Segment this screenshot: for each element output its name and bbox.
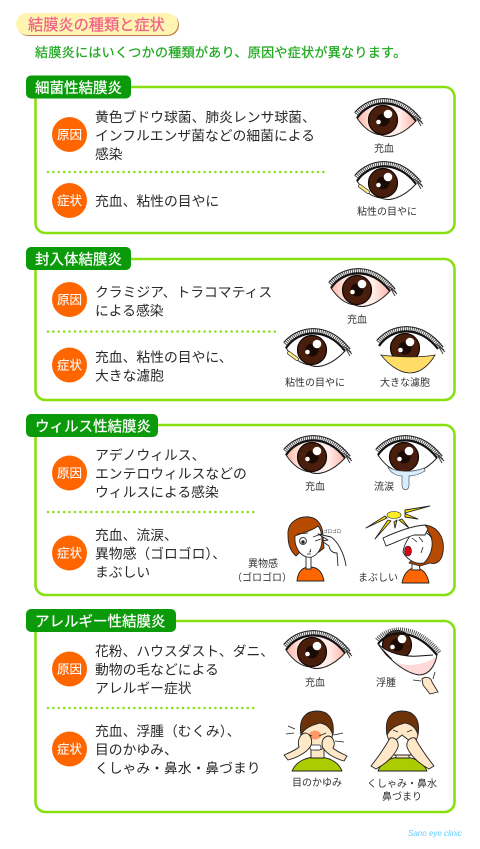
heading: ウィルス性結膜炎: ウィルス性結膜炎 — [35, 418, 151, 436]
illustration: rubbing eye — [288, 517, 346, 581]
title — [16, 13, 179, 36]
cause text: 花粉、ハウスダスト、ダニ、 — [95, 644, 274, 659]
icon: eye with discharge — [355, 162, 423, 199]
symptom text — [95, 350, 233, 384]
symptom text: 充血、粘性の目やに — [95, 194, 219, 209]
symptom text: 充血、浮腫（むくみ）、 — [95, 724, 240, 739]
badge: 症状 — [52, 348, 87, 382]
icon: red eye — [329, 269, 397, 306]
label: 鼻づまり — [382, 790, 422, 803]
symptom text — [95, 528, 226, 580]
symptom text: くしゃみ・鼻水・鼻づまり — [95, 760, 261, 776]
label: 大きな濾胞 — [380, 376, 430, 389]
label: 充血 — [305, 676, 325, 689]
heading: アレルギー性結膜炎 — [26, 609, 176, 632]
badge: 原因 — [52, 456, 87, 490]
cause text: 黄色ブドウ球菌、肺炎レンサ球菌、 — [95, 109, 316, 125]
cause text: アデノウィルス、 — [95, 447, 205, 463]
panel: ウィルス性結膜炎 — [26, 414, 454, 595]
heading: 封入体結膜炎 — [26, 247, 131, 270]
illustration: rubbing eye: ゴロゴロ — [323, 528, 341, 534]
icon: watering eye — [376, 436, 444, 490]
intro text: 結膜炎にはいくつかの種類があり、原因や症状が異なります。 — [35, 45, 406, 60]
badge: 症状 — [52, 183, 87, 218]
illustration: glare — [366, 506, 443, 583]
icon: red eye — [355, 99, 423, 136]
label: 充血 — [305, 480, 325, 493]
badge: 症状 — [52, 732, 87, 766]
label: 粘性の目やに — [285, 376, 345, 389]
badge: 原因: 原因 — [57, 466, 82, 480]
cause text: による感染 — [95, 302, 164, 318]
title: 結膜炎の種類と症状 — [28, 17, 165, 34]
icon: eye with discharge — [284, 329, 352, 366]
heading: 細菌性結膜炎: 細菌性結膜炎 — [35, 80, 122, 97]
cause text: 感染 — [95, 146, 123, 162]
label: まぶしい — [358, 572, 398, 584]
label: 目のかゆみ — [292, 777, 342, 789]
label: 異物感 — [248, 557, 278, 570]
label: 充血 — [374, 142, 394, 155]
cause text: エンテロウィルスなどの — [95, 466, 247, 482]
cause text: インフルエンザ菌などの細菌による — [95, 128, 315, 144]
icon: eye with follicles — [377, 327, 445, 373]
badge: 症状: 症状 — [57, 194, 82, 208]
label: 充血 — [347, 313, 367, 326]
badge: 症状: 症状 — [57, 546, 82, 560]
label: 浮腫 — [376, 677, 396, 689]
badge: 原因: 原因 — [57, 293, 82, 307]
symptom text: まぶしい — [95, 565, 150, 580]
cause text — [95, 109, 316, 162]
cause text: ウィルスによる感染 — [95, 484, 219, 500]
label: くしゃみ・鼻水 — [367, 777, 437, 790]
panel: 封入体結膜炎 — [26, 247, 454, 400]
illustration: sneezing — [371, 711, 434, 771]
heading: 細菌性結膜炎 — [26, 76, 131, 98]
symptom text — [95, 724, 261, 776]
icon: red eye — [284, 631, 352, 668]
badge: 症状 — [52, 536, 87, 570]
heading: 封入体結膜炎: 封入体結膜炎 — [35, 252, 122, 268]
panel: アレルギー性結膜炎 — [26, 609, 454, 812]
label — [232, 557, 292, 584]
cause text: クラミジア、トラコマティス — [95, 285, 272, 300]
label: 流涙 — [374, 480, 394, 493]
label: 粘性の目やに — [357, 205, 417, 218]
heading: ウィルス性結膜炎 — [26, 414, 158, 437]
badge: 症状: 症状 — [57, 358, 82, 372]
badge: 原因 — [52, 282, 87, 317]
label — [367, 777, 437, 803]
symptom text: 充血、流涙、 — [95, 528, 178, 543]
badge: 原因 — [52, 652, 87, 686]
heading: アレルギー性結膜炎: アレルギー性結膜炎 — [35, 614, 166, 630]
footer credit: Sano eye clinic — [408, 829, 462, 838]
illustration: itchy eyes — [284, 711, 347, 771]
badge: 原因: 原因 — [57, 662, 82, 676]
cause text — [95, 644, 274, 696]
icon: swollen eyelid — [377, 630, 440, 694]
symptom text: 大きな濾胞 — [95, 368, 164, 384]
icon: red eye — [284, 436, 352, 473]
cause text — [95, 285, 272, 318]
symptom text: 目のかゆみ、 — [95, 742, 178, 758]
label: （ゴロゴロ） — [232, 571, 292, 584]
symptom text: 異物感（ゴロゴロ）、 — [95, 546, 226, 562]
badge: 原因: 原因 — [57, 128, 82, 142]
badge: 症状: 症状 — [57, 742, 82, 756]
panel: 細菌性結膜炎 — [26, 76, 454, 233]
badge: 原因 — [52, 117, 87, 152]
cause text: アレルギー症状 — [95, 681, 192, 696]
cause text: 動物の毛などによる — [95, 662, 219, 678]
cause text — [95, 447, 247, 500]
symptom text: 充血、粘性の目やに、 — [95, 350, 233, 365]
